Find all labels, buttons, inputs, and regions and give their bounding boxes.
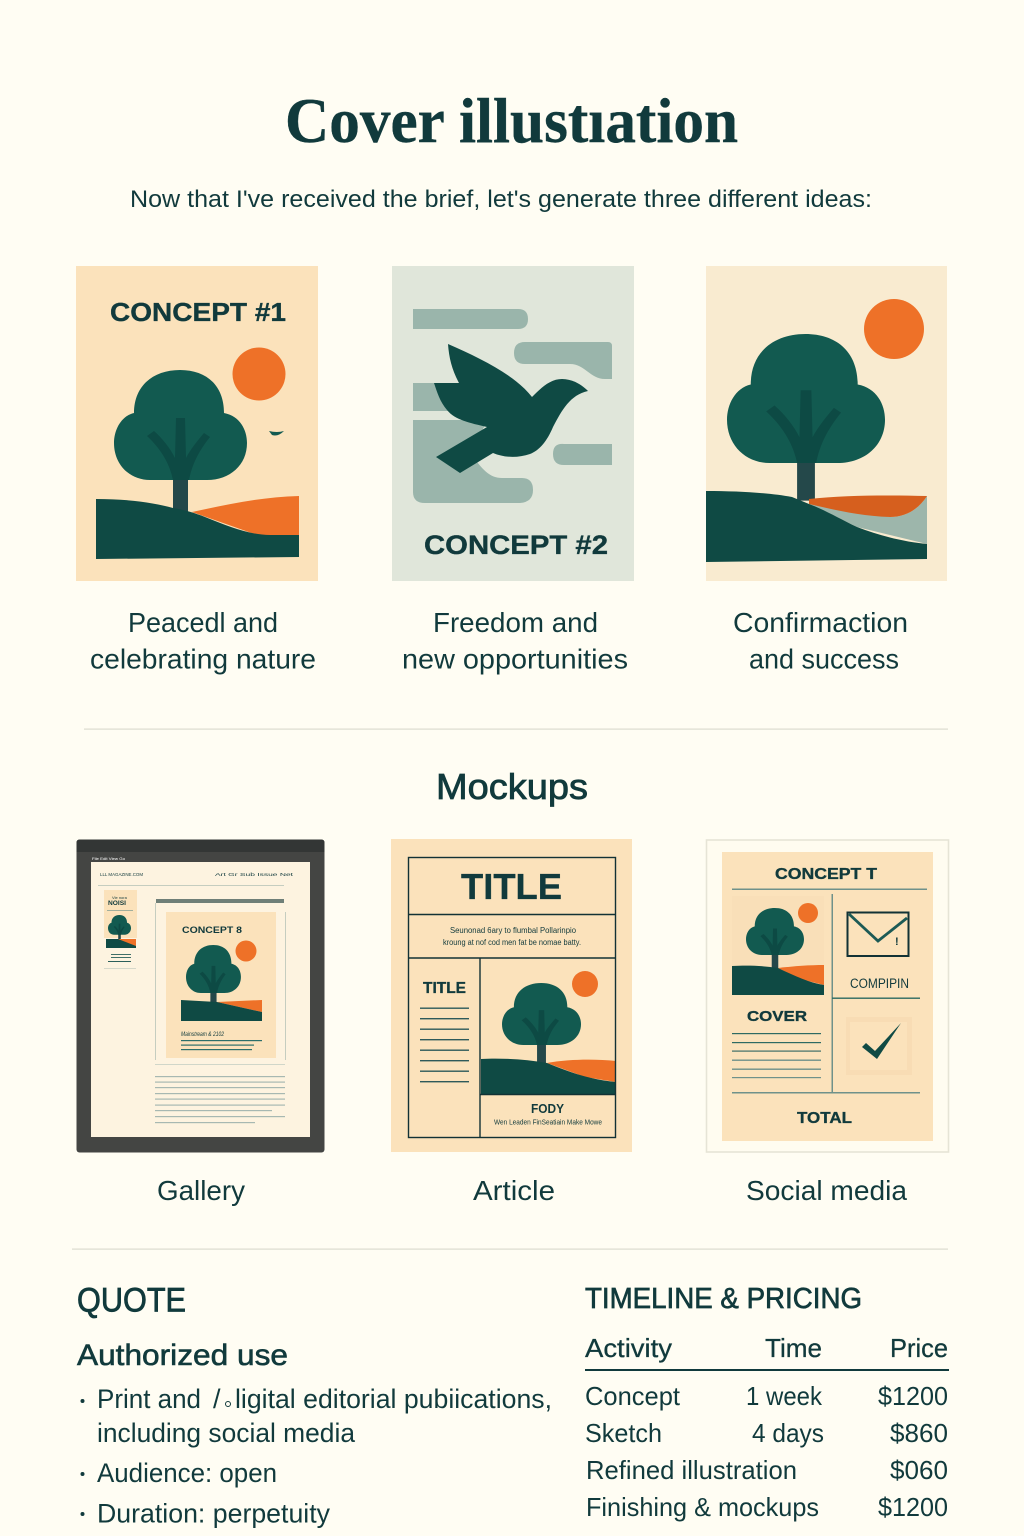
captions: concept 1: Peacedl and <box>128 607 278 638</box>
row: sketch: Sketch <box>585 1418 662 1448</box>
icon: sun <box>232 348 286 400</box>
total label: TOTAL <box>797 1110 852 1127</box>
icon: envelope: ! <box>895 936 899 948</box>
nav bar: LLL MAGAZINE.COM <box>100 872 143 877</box>
row: concept <box>585 1381 948 1411</box>
icon: check <box>846 1017 912 1075</box>
panel: quote <box>77 1282 552 1528</box>
icon: envelope <box>848 912 908 956</box>
heading: quote: QUOTE <box>77 1282 186 1320</box>
dark hill <box>96 499 299 559</box>
row: sketch <box>585 1418 948 1448</box>
captions: concept 2 <box>402 607 628 674</box>
article text lines <box>155 1064 285 1123</box>
title: Cover illustıation <box>285 85 738 156</box>
main artwork: CONCEPT 8 <box>182 925 242 936</box>
thumbnail: Vie nora <box>112 895 128 900</box>
cover label: COVER <box>747 1008 807 1025</box>
cover image <box>732 896 824 995</box>
thumbnail: NOISI <box>108 901 126 907</box>
captions: concept 3 <box>733 607 908 674</box>
water and hill <box>706 491 927 562</box>
footer text: Wen Leaden FinSeatiain Make Mowe <box>494 1118 602 1126</box>
panel: concept 3 <box>706 266 947 581</box>
panel: concept 1 <box>76 266 318 581</box>
sidebar: TITLE <box>423 980 466 997</box>
row: finishing and mockups <box>586 1492 948 1522</box>
mockup captions: Article <box>473 1175 555 1206</box>
concept 1 label: CONCEPT #1 <box>110 297 286 327</box>
row: concept: 1 week <box>746 1381 823 1411</box>
bullet list <box>80 1384 552 1528</box>
icon: dove <box>434 344 588 473</box>
captions: concept 2: new opportunities <box>402 644 628 674</box>
concept 2 label: CONCEPT #2 <box>424 530 608 560</box>
captions: concept 2: Freedom and <box>433 607 598 638</box>
mockup: gallery <box>76 840 324 1152</box>
nav bar <box>98 872 294 886</box>
mockup: gallery: File Edit View Go <box>92 856 126 861</box>
table header: Time <box>765 1333 822 1363</box>
frame lines <box>408 858 616 1138</box>
row: refined illustration: $060 <box>890 1455 948 1485</box>
bullet list: Print and <box>97 1384 201 1414</box>
bullet list: Duration: perpetuity <box>97 1498 330 1528</box>
table header: Price <box>890 1333 948 1363</box>
sidebar <box>420 980 469 1082</box>
row: refined illustration: Refined illustration <box>586 1455 797 1485</box>
compipin label: COMPIPIN <box>850 976 909 991</box>
mockup captions <box>157 1175 907 1206</box>
subtitle: Now that I've received the brief, let's generate three different ideas: <box>130 186 872 213</box>
main artwork: Mainstream & 2102 <box>181 1032 225 1038</box>
bullet list: Audience: open <box>97 1458 277 1488</box>
panel: concept 2 <box>392 266 634 581</box>
bullet list: ligital editorial pubiications, <box>235 1384 552 1414</box>
mockup captions: Social media <box>746 1175 907 1206</box>
captions: concept 1: celebrating nature <box>90 644 316 674</box>
intro text: Seunonad 6ary to flumbal Pollarinpio <box>450 926 577 935</box>
row: concept: $1200 <box>878 1381 948 1411</box>
header: CONCEPT T <box>775 866 877 883</box>
main artwork <box>155 899 286 1060</box>
panel: timeline and pricing <box>585 1283 949 1522</box>
orange hill <box>192 496 299 536</box>
captions: concept 3: and success <box>749 644 899 674</box>
row: concept: Concept <box>585 1381 681 1411</box>
footer text: FODY <box>531 1102 565 1116</box>
captions: concept 3: Confirmaction <box>733 607 908 638</box>
icon: tree <box>114 370 247 512</box>
row: sketch: 4 days <box>752 1418 824 1448</box>
bullet list: / <box>213 1384 221 1414</box>
artwork <box>481 971 616 1094</box>
cloud bars <box>413 309 612 503</box>
icon: sun <box>864 299 924 359</box>
icon: small bird <box>269 431 284 436</box>
intro text: kroung at nof cod men fat be nomae batty. <box>443 938 581 947</box>
bullet list: including social media <box>97 1418 356 1448</box>
title: TITLE <box>461 866 562 907</box>
footer text <box>494 1102 602 1126</box>
row: sketch: $860 <box>890 1418 948 1448</box>
subheading: authorized use: Authorized use <box>77 1339 288 1372</box>
captions: concept 1 <box>90 607 316 674</box>
row: finishing and mockups: $1200 <box>878 1492 948 1522</box>
icon: tree <box>727 334 885 501</box>
row: refined illustration <box>586 1455 948 1485</box>
mockup: social media <box>706 840 948 1152</box>
heading: timeline and pricing: TIMELINE & PRICING <box>585 1283 862 1315</box>
thumbnail <box>104 890 137 969</box>
divider lines <box>732 888 927 1094</box>
table header <box>585 1333 949 1371</box>
heading: mockups: Mockups <box>436 766 588 807</box>
mockup: article <box>391 839 632 1152</box>
row: finishing and mockups: Finishing & mockups <box>586 1492 819 1522</box>
table header: Activity <box>585 1333 672 1363</box>
intro text <box>443 926 581 947</box>
mockup captions: Gallery <box>157 1175 245 1206</box>
nav bar: Art Gr Sub Issue Net <box>215 872 294 877</box>
